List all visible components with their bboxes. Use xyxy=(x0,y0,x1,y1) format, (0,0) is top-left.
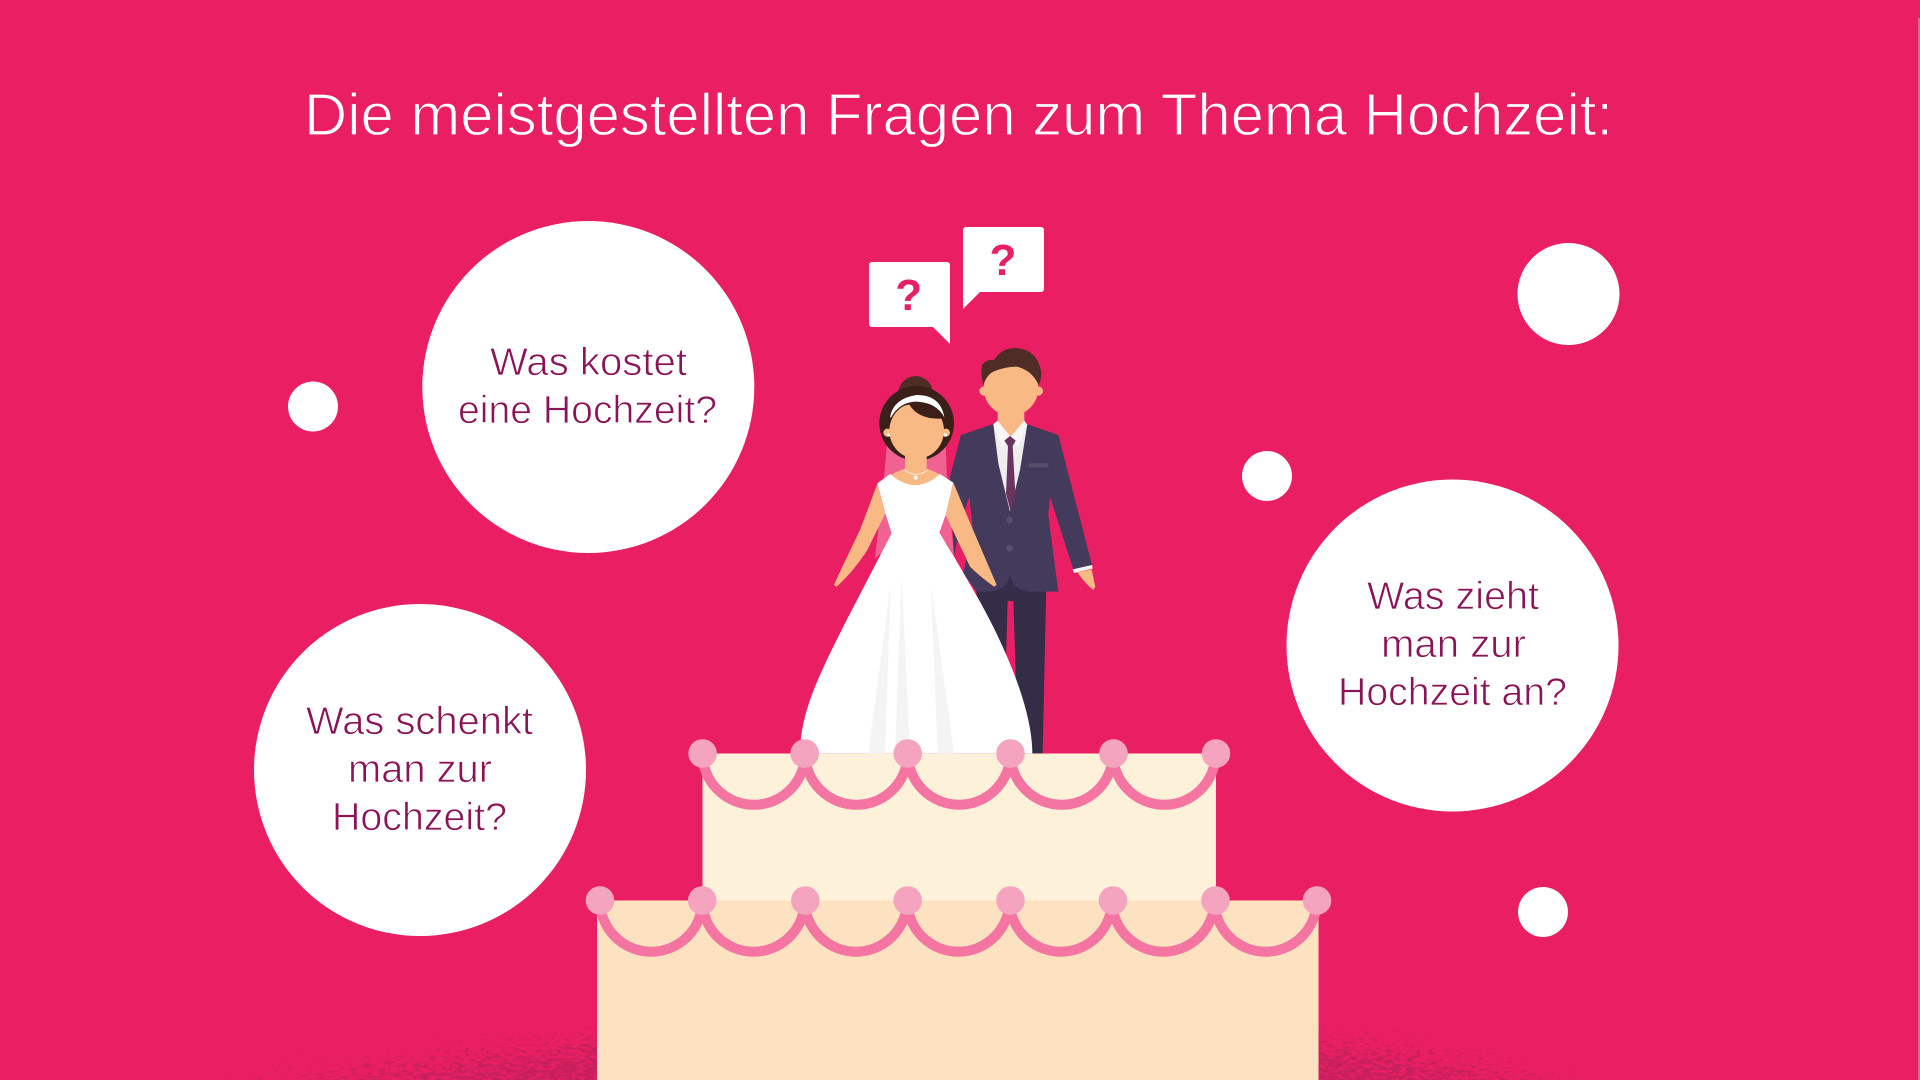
question bubble: Was zieht man zur Hochzeit an? xyxy=(1286,480,1618,812)
speech bubble: groom xyxy=(963,227,1044,309)
title: Die meistgestellten Fragen zum Thema Hochzeit: xyxy=(304,82,1613,148)
question bubble: Was zieht man zur Hochzeit an?: Hochzeit an? xyxy=(1338,671,1567,714)
decorative dots xyxy=(288,243,1620,937)
question bubble: Was kostet eine Hochzeit?: Was kostet xyxy=(490,341,687,384)
cake bottom tier xyxy=(586,886,1331,1080)
speech bubble: bride xyxy=(869,262,950,344)
question bubble: Was schenkt man zur Hochzeit? xyxy=(254,604,586,936)
question bubble: Was schenkt man zur Hochzeit?: Was schenkt xyxy=(306,700,533,743)
bride figure xyxy=(800,376,1032,753)
speech bubble: bride: ? xyxy=(895,271,922,320)
question bubble: Was kostet eine Hochzeit?: eine Hochzeit? xyxy=(458,389,717,432)
question bubble: Was zieht man zur Hochzeit an?: man zur xyxy=(1381,623,1526,666)
speech bubble: groom: ? xyxy=(990,236,1016,285)
question bubble: Was kostet eine Hochzeit? xyxy=(422,221,754,553)
groom figure xyxy=(950,348,1095,753)
question bubble: Was schenkt man zur Hochzeit?: Hochzeit? xyxy=(332,796,507,839)
question bubble: Was zieht man zur Hochzeit an?: Was zieht xyxy=(1367,575,1539,618)
bottom grain shadow xyxy=(130,1040,1660,1080)
cake top tier xyxy=(688,739,1230,900)
question bubble: Was schenkt man zur Hochzeit?: man zur xyxy=(348,748,492,791)
right edge stripe xyxy=(1918,18,1920,1080)
